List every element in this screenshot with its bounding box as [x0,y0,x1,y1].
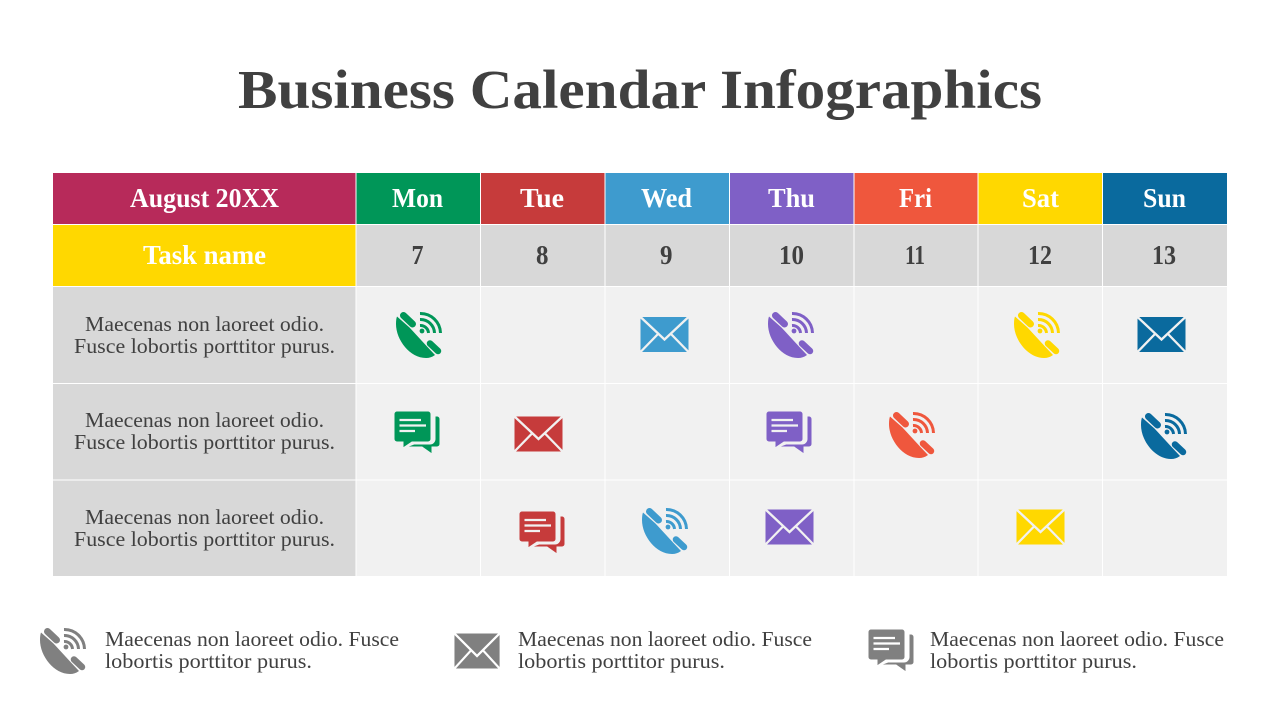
icon: phone, row 1 Thu [768,313,812,358]
header: Sat [978,173,1102,224]
date: 7: 7 [412,240,424,270]
icon: phone, row 2 Fri [889,413,934,458]
icon: phone, row 1 Mon [396,313,440,358]
date: 9: 9 [660,240,672,270]
header: Mon: Mon [392,183,443,213]
header: Tue [481,173,604,224]
schedule grid background [356,287,1227,576]
icon: phone, row 1 Sat [1014,313,1058,358]
header: month: August 20XX [130,183,279,213]
legend text: chat: Maecenas non laoreet odio. Fusce [930,627,1224,651]
task row 1 label: Maecenas non laoreet odio. [85,312,324,336]
icon: mail, row 2 Tue [514,416,563,452]
icon: mail, row 3 Thu [765,509,814,545]
icon: mail, row 1 Wed [640,316,689,352]
legend text: mail: lobortis porttitor purus. [518,649,725,673]
icon: chat, row 2 Mon [394,411,440,454]
date: 10: 10 [779,240,804,270]
header: Sat: Sat [1022,183,1059,213]
icon: mail, row 1 Sun [1137,316,1186,352]
task row 3 label [53,480,356,576]
date: 11: 11 [905,240,925,270]
header: Fri [854,173,978,224]
date: 12: 12 [1028,240,1052,270]
legend text: phone [105,627,399,673]
header: Wed: Wed [641,183,692,213]
calendar table [53,173,1227,576]
task row 2 label: Maecenas non laoreet odio. [85,408,324,432]
icon: chat, row 2 Thu [766,411,812,454]
icon: gray mail [454,633,500,669]
header: Sun: Sun [1143,183,1186,213]
icon: gray chat [868,629,914,672]
header: Wed [606,173,729,224]
legend: phone [40,627,399,674]
header: Tue: Tue [520,183,564,213]
header: Thu: Thu [768,183,815,213]
icon: phone, row 3 Wed [642,509,686,554]
task name header: Task name [143,240,266,270]
legend text: chat [930,627,1224,673]
task row 3 label: Maecenas non laoreet odio. [85,505,324,529]
task row 1 label [53,287,356,383]
date: 13 [1103,225,1227,286]
date: 8: 8 [536,240,548,270]
date: 11 [854,225,978,286]
task row 1 label: Fusce lobortis porttitor purus. [74,334,335,358]
icon: chat, row 3 Tue [519,511,565,554]
header: Thu [730,173,854,224]
icon: mail, row 3 Sat [1016,509,1065,545]
task row 2 label: Fusce lobortis porttitor purus. [74,430,335,454]
legend: mail [454,627,812,673]
legend text: mail [518,627,812,673]
header: month [53,173,356,224]
task row 2 label [53,384,356,480]
icon: gray phone [40,629,84,674]
task row 3 label: Fusce lobortis porttitor purus. [74,527,335,551]
legend text: phone: lobortis porttitor purus. [105,649,312,673]
date: 7 [356,225,480,286]
header: Sun [1103,173,1227,224]
legend: chat [868,627,1224,673]
date: 12 [978,225,1102,286]
legend text: chat: lobortis porttitor purus. [930,649,1137,673]
legend text: mail: Maecenas non laoreet odio. Fusce [518,627,812,651]
date: 10 [730,225,854,286]
legend text: phone: Maecenas non laoreet odio. Fusce [105,627,399,651]
header: Mon [356,173,480,224]
date: 13: 13 [1152,240,1176,270]
date: 9 [606,225,729,286]
icon: phone, row 2 Sun [1141,414,1186,459]
task name header [53,225,356,286]
header: Fri: Fri [899,183,932,213]
date: 8 [481,225,604,286]
title: Business Calendar Infographics [238,59,1042,120]
